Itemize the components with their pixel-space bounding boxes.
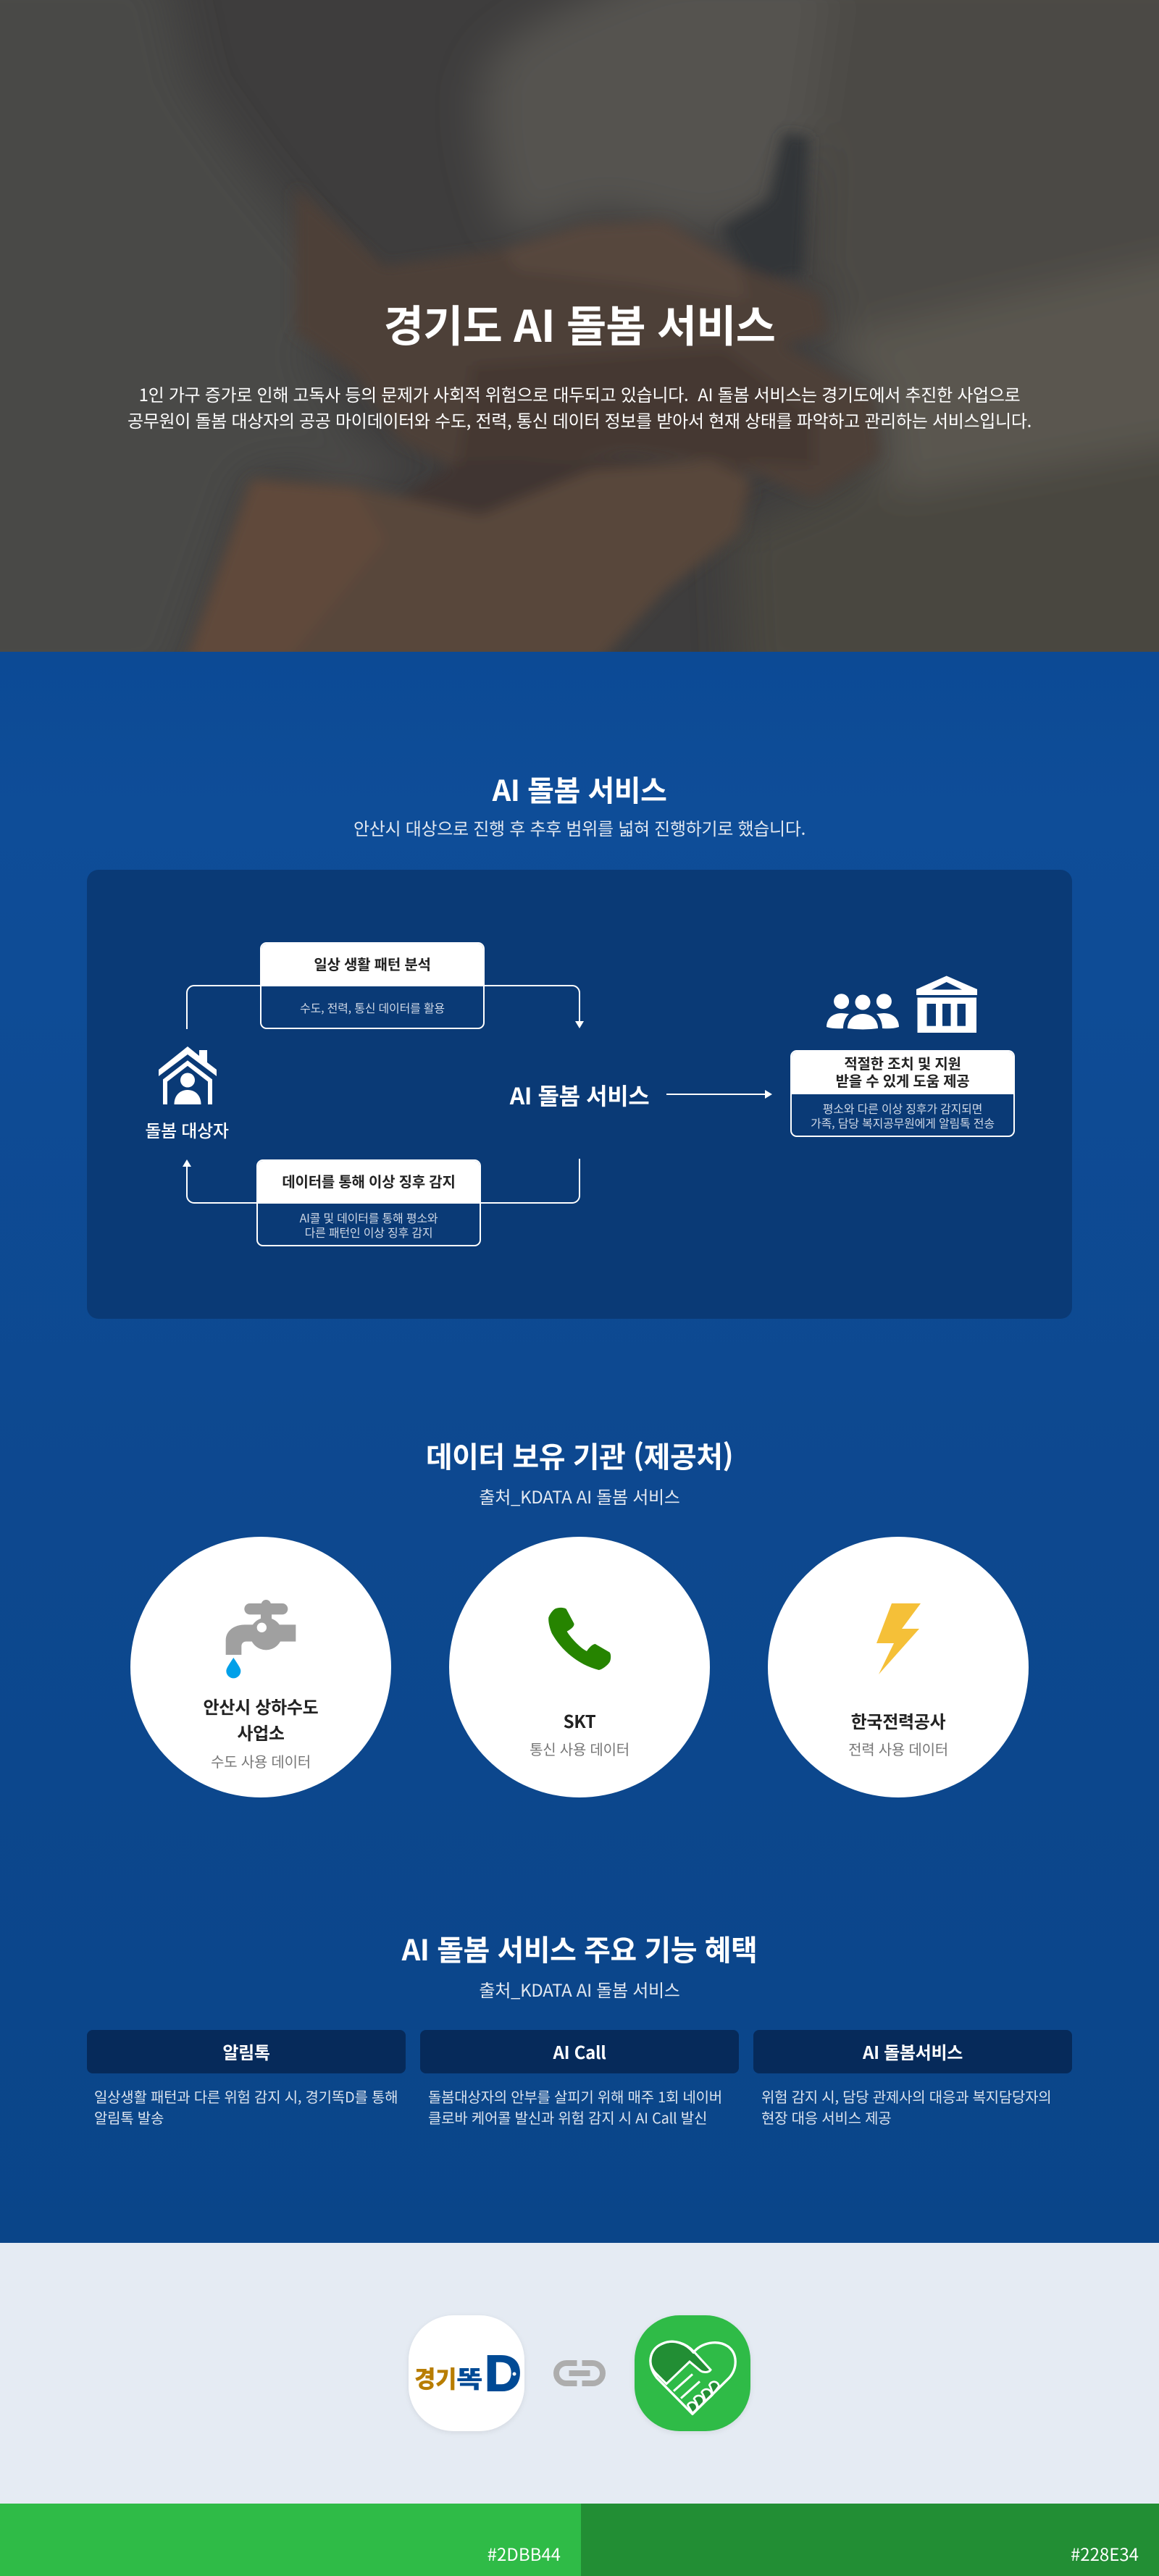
box: support provided: 받을 수 있게 도움 제공 xyxy=(836,1070,969,1091)
name: 안산시 상하수도 xyxy=(204,1693,318,1719)
benefit text: AI care service xyxy=(761,2086,1051,2128)
benefit text: notification talk: 알림톡 발송 xyxy=(94,2107,164,2128)
heading title: AI 돌봄 서비스 주요 기능 혜택 xyxy=(402,1927,757,1969)
box: anomaly detection: 데이터를 통해 이상 징후 감지 xyxy=(282,1170,456,1191)
icon: house with person xyxy=(159,1046,217,1104)
name: 한국전력공사 xyxy=(851,1708,945,1733)
box: daily pattern analysis: 일상 생활 패턴 분석 xyxy=(314,953,431,974)
benefit text: notification talk: 일상생활 패턴과 다른 위험 감지 시, 경기똑D를 통해 xyxy=(94,2086,398,2107)
label: AI care service center: AI 돌봄 서비스 xyxy=(510,1078,649,1112)
circle: KEPCO xyxy=(768,1537,1029,1797)
heading subtitle: 출처_KDATA AI 돌봄 서비스 xyxy=(479,1483,680,1509)
color swatch: dark green xyxy=(581,2504,1159,2576)
hex label: #2DBB44 xyxy=(488,2541,561,2566)
icon: phone xyxy=(548,1608,611,1670)
box: anomaly detection xyxy=(256,1159,481,1246)
heading: AI care service xyxy=(353,768,806,840)
heading subtitle: 출처_KDATA AI 돌봄 서비스 xyxy=(479,1976,680,2002)
box: anomaly detection: AI콜 및 데이터를 통해 평소와 xyxy=(300,1208,438,1225)
hero panel xyxy=(0,0,1159,652)
description: 전력 사용 데이터 xyxy=(848,1738,948,1759)
benefit header: AI Call: AI Call xyxy=(553,2039,606,2064)
heading title: AI 돌봄 서비스 xyxy=(493,768,666,810)
box: anomaly detection: 다른 패턴인 이상 징후 감지 xyxy=(305,1222,432,1240)
label: care recipient: 돌봄 대상자 xyxy=(145,1117,229,1142)
heading title: 데이터 보유 기관 (제공처) xyxy=(426,1434,733,1476)
benefit header: AI care service: AI 돌봄서비스 xyxy=(863,2039,963,2064)
logo: Gyeonggi Ddok D: 똑 xyxy=(456,2360,482,2395)
circle: water utility xyxy=(130,1537,391,1797)
icon: institution building xyxy=(916,976,977,1033)
box: daily pattern analysis xyxy=(260,942,485,1029)
box: support provided: 평소와 다른 이상 징후가 감지되면 xyxy=(823,1099,982,1117)
icon: group of people xyxy=(827,994,899,1030)
description: 통신 사용 데이터 xyxy=(530,1738,629,1759)
description: 수도 사용 데이터 xyxy=(211,1750,311,1771)
blue section background xyxy=(0,652,1159,2243)
benefit text: AI care service: 위험 감지 시, 담당 관제사의 대응과 복지담당자의 xyxy=(761,2086,1051,2107)
heading: key benefits xyxy=(401,1927,757,2002)
icon: lightning bolt xyxy=(876,1603,921,1674)
panel: service flow diagram xyxy=(87,870,1072,1319)
logo: Gyeonggi Ddok D: 경기 xyxy=(414,2360,456,2395)
hero photo: clasped hands xyxy=(0,0,1159,652)
flow connector arrows xyxy=(183,985,772,1204)
benefit header: AI Call xyxy=(420,2030,739,2073)
benefit header: AI care service xyxy=(753,2030,1072,2073)
icon: link xyxy=(553,2360,606,2386)
heading: data providers xyxy=(426,1434,733,1509)
logo: green heart handshake xyxy=(635,2315,750,2431)
circle: SKT xyxy=(449,1537,710,1797)
hero description: 공무원이 돌봄 대상자의 공공 마이데이터와 수도, 전력, 통신 데이터 정보를 받아서 현재 상태를 파악하고 관리하는 서비스입니다. xyxy=(127,407,1032,432)
name: SKT xyxy=(564,1708,595,1733)
benefit text: AI care service: 현장 대응 서비스 제공 xyxy=(761,2107,891,2128)
heading subtitle: 안산시 대상으로 진행 후 추후 범위를 넓혀 진행하기로 했습니다. xyxy=(353,815,806,840)
box: support provided xyxy=(790,1050,1015,1137)
benefit text: notification talk xyxy=(94,2086,398,2128)
logo section background xyxy=(0,2243,1159,2504)
hero description xyxy=(127,381,1032,432)
hero description: 1인 가구 증가로 인해 고독사 등의 문제가 사회적 위험으로 대두되고 있습니다. AI 돌봄 서비스는 경기도에서 추진한 사업으로 xyxy=(139,381,1020,406)
hex label: #228E34 xyxy=(1071,2541,1139,2566)
benefit text: AI Call: 돌봄대상자의 안부를 살피기 위해 매주 1회 네이버 xyxy=(428,2086,722,2107)
logo: Gyeonggi Ddok D: D xyxy=(485,2345,521,2401)
box: support provided: 적절한 조치 및 지원 xyxy=(844,1052,961,1073)
benefit text: AI Call: 클로바 케어콜 발신과 위험 감지 시 AI Call 발신 xyxy=(428,2107,707,2128)
benefit text: AI Call xyxy=(428,2086,722,2128)
name xyxy=(204,1693,318,1745)
box: support provided: 가족, 담당 복지공무원에게 알림톡 전송 xyxy=(811,1114,995,1131)
box: daily pattern analysis: 수도, 전력, 통신 데이터를 활용 xyxy=(300,998,445,1015)
color swatch: light green xyxy=(0,2504,581,2576)
icon: water tap xyxy=(226,1600,296,1679)
logo: Gyeonggi Ddok D xyxy=(409,2315,524,2431)
name: 사업소 xyxy=(237,1719,285,1745)
benefit header: notification talk: 알림톡 xyxy=(222,2039,270,2064)
hero title: 경기도 AI 돌봄 서비스 xyxy=(384,292,775,355)
benefit header: notification talk xyxy=(87,2030,406,2073)
